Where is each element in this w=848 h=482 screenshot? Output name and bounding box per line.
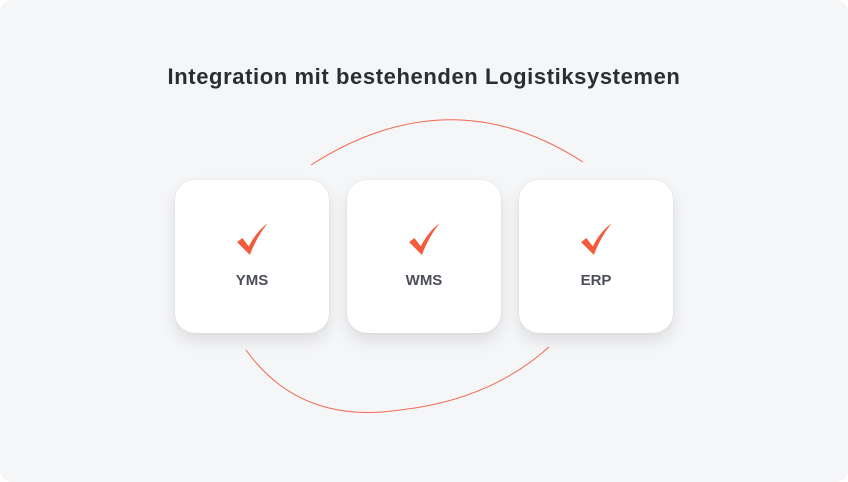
- icon: check: [237, 223, 268, 255]
- card: WMS: [347, 180, 501, 333]
- card: YMS: [175, 180, 329, 333]
- card: ERP: [519, 180, 673, 333]
- title: Integration mit bestehenden Logistiksystemen: [168, 64, 680, 89]
- icon: check: [409, 223, 440, 255]
- label: ERP: [581, 272, 611, 289]
- icon: check: [581, 223, 612, 255]
- label: YMS: [236, 272, 268, 289]
- label: WMS: [406, 272, 442, 289]
